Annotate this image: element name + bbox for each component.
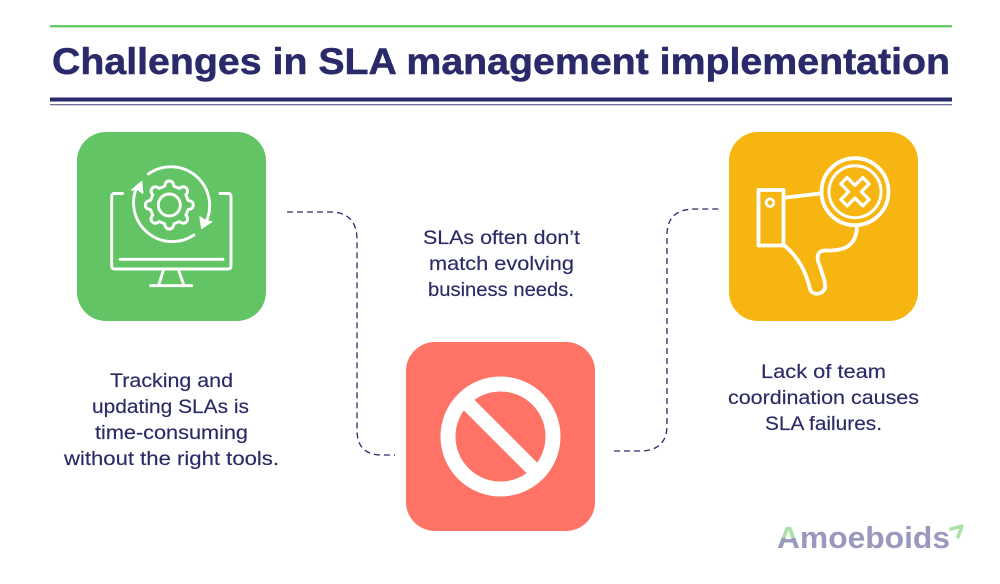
text: evolving needs bbox=[423, 227, 581, 301]
arrow: dashed connector left bbox=[287, 212, 395, 455]
icon tile: yellow bbox=[729, 132, 918, 321]
text: tracking: updating SLAs is bbox=[92, 396, 249, 418]
panel: coordination challenge bbox=[728, 132, 919, 435]
icon tile: red bbox=[406, 342, 595, 531]
arrow: dashed connector right bbox=[614, 209, 722, 451]
icon: prohibited sign bbox=[448, 384, 553, 489]
text: tracking: Tracking and bbox=[110, 370, 233, 392]
title: Challenges in SLA management implementation bbox=[52, 41, 950, 82]
icon: thumbs down with x bbox=[758, 158, 888, 294]
panel: evolving needs challenge bbox=[406, 227, 595, 531]
text: tracking: without the right tools. bbox=[63, 448, 279, 470]
text: evolving needs: SLAs often don’t bbox=[423, 227, 581, 249]
icon tile: green bbox=[77, 132, 266, 321]
panel: tracking challenge bbox=[63, 132, 279, 470]
icon: monitor with gear bbox=[112, 167, 231, 286]
text: coordination: Lack of team bbox=[761, 361, 886, 383]
text: coordination bbox=[728, 361, 919, 435]
text: tracking bbox=[63, 370, 279, 470]
text: evolving needs: business needs. bbox=[428, 279, 574, 301]
logo: Amoeboids: Amoeboids bbox=[777, 520, 950, 555]
text: coordination: SLA failures. bbox=[765, 413, 882, 435]
text: evolving needs: match evolving bbox=[429, 253, 574, 275]
text: tracking: time-consuming bbox=[95, 422, 248, 444]
text: coordination: coordination causes bbox=[728, 387, 919, 409]
